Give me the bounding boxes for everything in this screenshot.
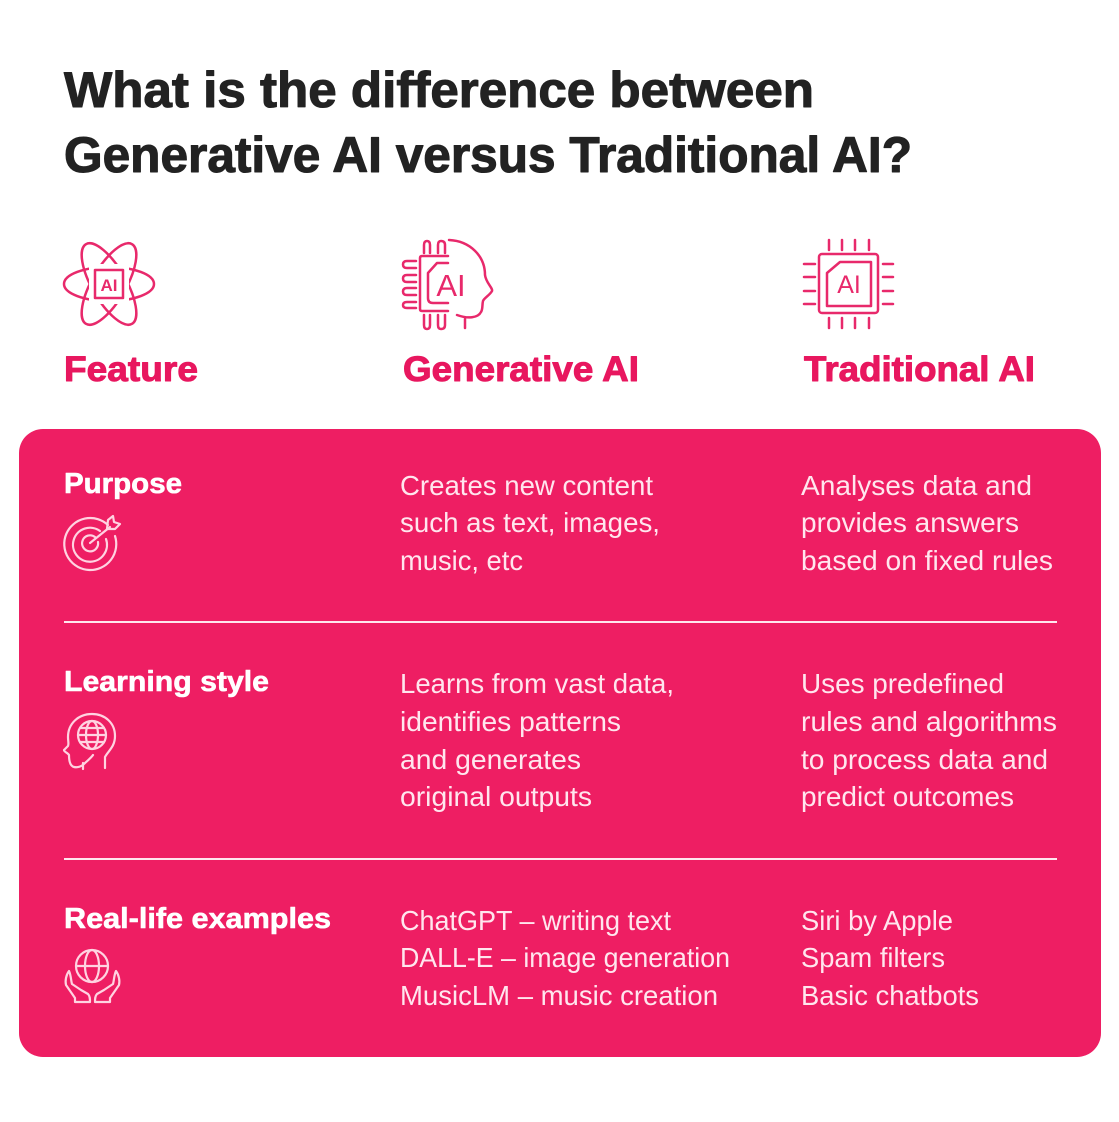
Purpose: traditional AI text bbox=[801, 470, 1053, 576]
Learning style: traditional AI text: to process data and bbox=[801, 744, 1048, 775]
title bbox=[64, 62, 912, 183]
icon: AI processor chip bbox=[804, 240, 893, 328]
icon: atom with AI chip: AI bbox=[100, 276, 118, 295]
panel: comparison table bbox=[19, 429, 1101, 1057]
Learning style: traditional AI text: predict outcomes bbox=[801, 781, 1014, 812]
Purpose: traditional AI text: based on fixed rules bbox=[801, 545, 1053, 576]
Real-life examples: traditional AI text: Basic chatbots bbox=[801, 980, 979, 1011]
Purpose: generative AI text bbox=[400, 470, 660, 576]
row label: Purpose: Purpose bbox=[64, 468, 182, 500]
Learning style: traditional AI text: Uses predefined bbox=[801, 668, 1004, 699]
icon: atom with AI chip bbox=[64, 236, 154, 332]
Purpose: traditional AI text: provides answers bbox=[801, 507, 1019, 538]
Real-life examples: generative AI text: ChatGPT – writing text bbox=[400, 905, 671, 936]
Real-life examples: traditional AI text bbox=[801, 905, 979, 1011]
heading: Feature: Feature bbox=[64, 350, 198, 389]
Learning style: traditional AI text bbox=[801, 668, 1057, 812]
Real-life examples: generative AI text bbox=[400, 905, 730, 1011]
Real-life examples: traditional AI text: Siri by Apple bbox=[801, 905, 953, 936]
icon: AI head with chip: AI bbox=[436, 268, 466, 303]
Purpose: generative AI text: Creates new content bbox=[400, 470, 653, 501]
icon: hands holding globe bbox=[66, 950, 119, 1002]
Learning style: traditional AI text: rules and algorithms bbox=[801, 706, 1057, 737]
Real-life examples: generative AI text: DALL-E – image generation bbox=[400, 942, 730, 973]
icon: target with arrow bbox=[64, 516, 120, 570]
Learning style: generative AI text: Learns from vast data, bbox=[400, 668, 674, 699]
Purpose: generative AI text: such as text, images, bbox=[400, 507, 660, 538]
title: Generative AI versus Traditional AI? bbox=[64, 127, 912, 183]
Learning style: generative AI text bbox=[400, 668, 674, 812]
Learning style: generative AI text: original outputs bbox=[400, 781, 592, 812]
row label: Learning style: Learning style bbox=[64, 666, 269, 698]
Purpose: traditional AI text: Analyses data and bbox=[801, 470, 1032, 501]
heading: Traditional AI: Traditional AI bbox=[804, 350, 1035, 389]
title: What is the difference between bbox=[64, 62, 814, 118]
Real-life examples: traditional AI text: Spam filters bbox=[801, 942, 945, 973]
icon: AI processor chip: AI bbox=[837, 271, 861, 299]
icon: head with globe bbox=[64, 714, 115, 769]
Real-life examples: generative AI text: MusicLM – music creation bbox=[400, 980, 718, 1011]
heading: Generative AI: Generative AI bbox=[403, 350, 639, 389]
Purpose: generative AI text: music, etc bbox=[400, 545, 523, 576]
row label: Real-life examples: Real-life examples bbox=[64, 903, 331, 935]
Learning style: generative AI text: identifies patterns bbox=[400, 706, 621, 737]
icon: AI head with chip bbox=[403, 240, 492, 329]
Learning style: generative AI text: and generates bbox=[400, 744, 581, 775]
